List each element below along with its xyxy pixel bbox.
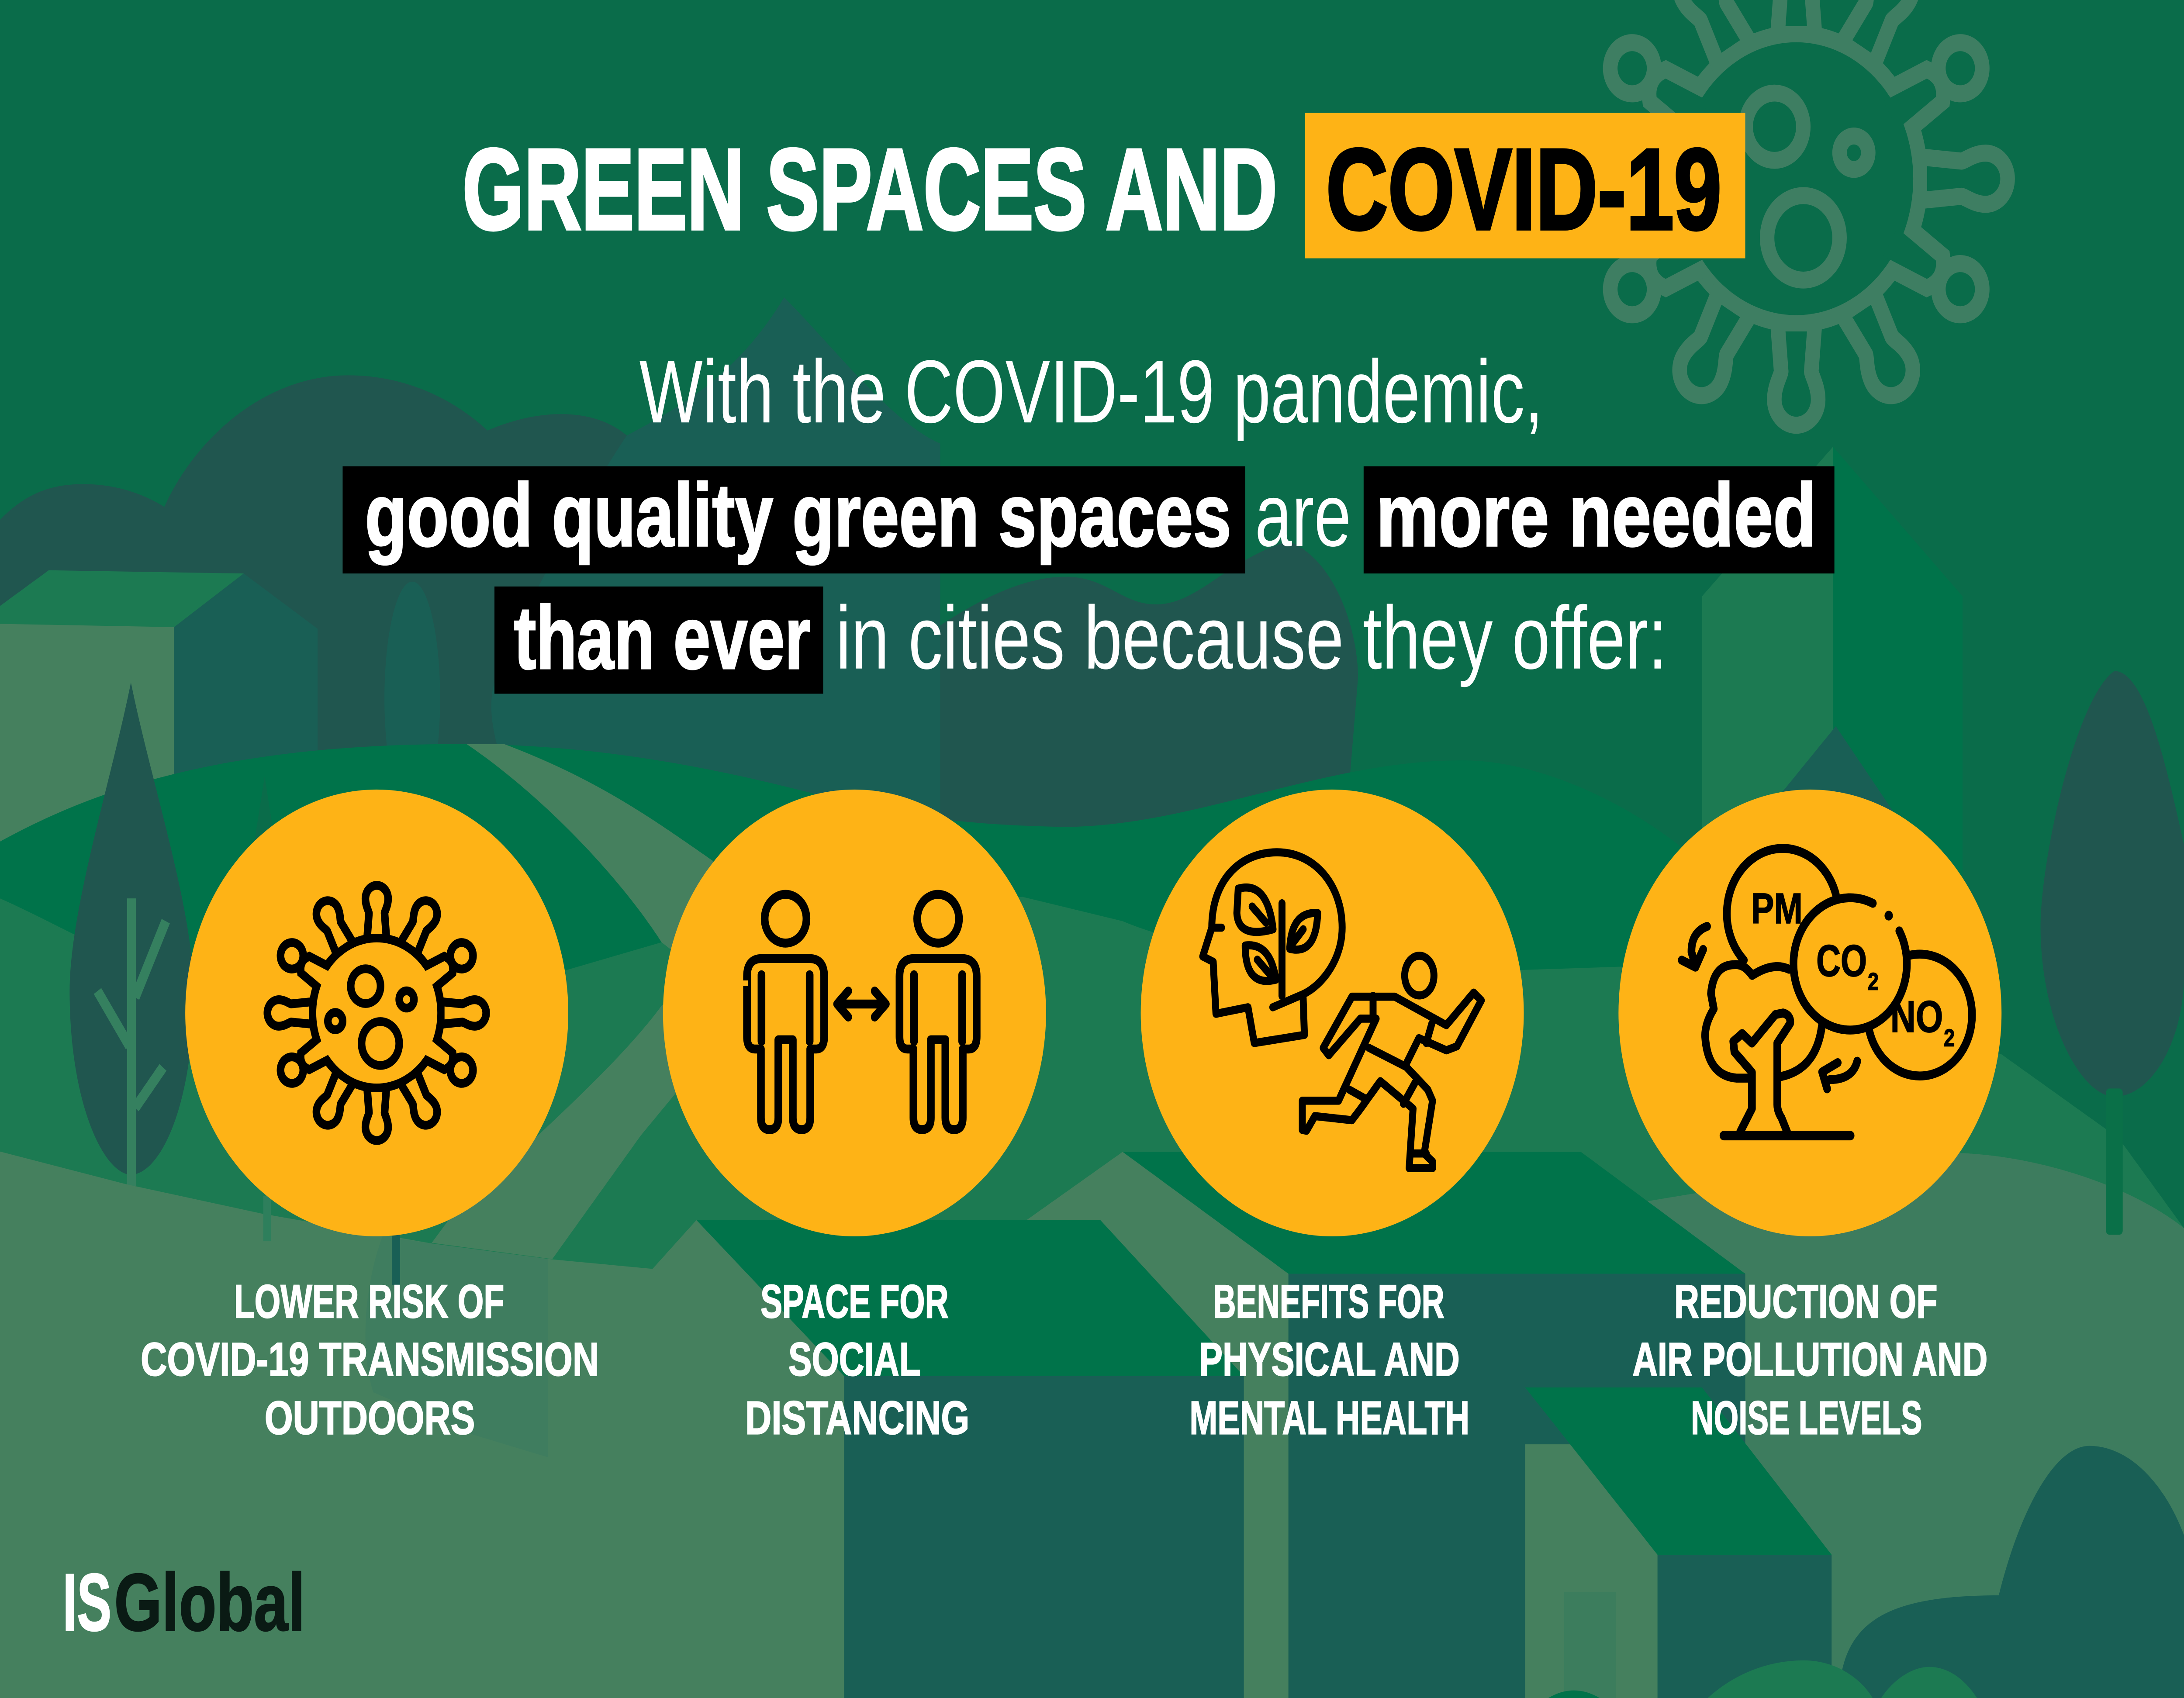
label 3: MENTAL HEALTH xyxy=(1189,1392,1469,1444)
icon: runner xyxy=(1303,956,1481,1168)
title highlight box xyxy=(1305,113,1745,258)
pollutant labels: 2 xyxy=(1868,968,1879,995)
label 2: SPACE FOR xyxy=(760,1275,949,1328)
tree: right dark xyxy=(2041,671,2184,1097)
intro line 3 remainder: in cities because they offer: xyxy=(836,588,1667,688)
yellow circle 1 xyxy=(185,790,568,1236)
label 3 xyxy=(1189,1275,1469,1444)
icon: tree and pollutants xyxy=(1682,849,1972,1135)
benefit 1: lower risk xyxy=(141,790,599,1444)
title text: covid-19: COVID-19 xyxy=(1326,125,1721,254)
road: lower path xyxy=(432,975,738,1259)
label 1: LOWER RISK OF xyxy=(234,1275,504,1328)
highlight: than ever: than ever xyxy=(514,588,811,688)
yellow circle 2 xyxy=(663,790,1046,1236)
road: upper path xyxy=(467,744,752,991)
highlight: good quality green spaces: good quality green spaces xyxy=(365,466,1231,565)
yellow circle 4 xyxy=(1618,790,2001,1236)
pollutant labels: CO xyxy=(1816,936,1867,986)
icon: virus xyxy=(271,890,482,1136)
logo: ISGlobal: IS xyxy=(62,1556,111,1648)
house: right xyxy=(1525,1387,1832,1698)
label 2: SOCIAL xyxy=(788,1333,921,1386)
label 4: REDUCTION OF xyxy=(1674,1275,1938,1328)
title text: green spaces and: GREEN SPACES AND xyxy=(463,125,1277,254)
watermark virus xyxy=(1592,0,2000,417)
highlight: more needed: more needed xyxy=(1376,466,1816,565)
meadow: medium green xyxy=(0,897,2184,1300)
intro word: are: are xyxy=(1255,466,1351,565)
label 3: BENEFITS FOR xyxy=(1213,1275,1444,1328)
hill: dark teal centre xyxy=(940,541,1358,837)
small tree: subtle xyxy=(242,777,287,918)
title xyxy=(463,113,1745,258)
label 1: OUTDOORS xyxy=(265,1392,475,1444)
label 3: PHYSICAL AND xyxy=(1199,1333,1460,1386)
bushes bottom right xyxy=(1546,1446,2184,1698)
label 1 xyxy=(141,1275,599,1444)
benefit 4: air pollution and noise xyxy=(1618,790,2001,1444)
intro line 1: With the COVID-19 pandemic, xyxy=(639,342,1543,442)
icon: head with plant xyxy=(1203,852,1342,1043)
label 4: NOISE LEVELS xyxy=(1691,1392,1922,1444)
tree: small teal xyxy=(384,582,440,815)
pollutant labels: NO xyxy=(1890,992,1943,1042)
logo: ISGlobal: Global xyxy=(114,1556,305,1648)
hills: dark teal left xyxy=(0,375,641,861)
pollutant labels xyxy=(1751,885,1955,1052)
yellow circle 3 xyxy=(1141,790,1524,1236)
pollutant labels: PM xyxy=(1751,885,1803,933)
icon: two people with arrow xyxy=(740,894,977,1130)
building: top right xyxy=(1702,447,1963,910)
mountain: teal peak xyxy=(491,297,940,861)
tree: left dark xyxy=(69,682,194,1186)
house: centre xyxy=(1123,1152,1745,1698)
benefit 2: social distancing xyxy=(663,790,1046,1444)
tree trunks xyxy=(263,1088,2123,1285)
hill: main green xyxy=(0,744,2001,1137)
ground: light green xyxy=(0,1152,2184,1698)
intro text block xyxy=(342,342,1835,694)
label 2: DISTANCING xyxy=(745,1392,969,1444)
label 4 xyxy=(1632,1275,1987,1444)
label 2 xyxy=(745,1275,969,1444)
house: top left xyxy=(0,570,318,861)
benefit 3: physical and mental health xyxy=(1141,790,1524,1444)
house: centre left xyxy=(696,1220,1244,1698)
pollutant labels: 2 xyxy=(1944,1025,1955,1052)
label 4: AIR POLLUTION AND xyxy=(1632,1333,1987,1386)
ground: right hill shade xyxy=(1646,1153,2184,1698)
ground: left subtle house shade xyxy=(366,1236,548,1457)
label 1: COVID-19 TRANSMISSION xyxy=(141,1333,599,1386)
